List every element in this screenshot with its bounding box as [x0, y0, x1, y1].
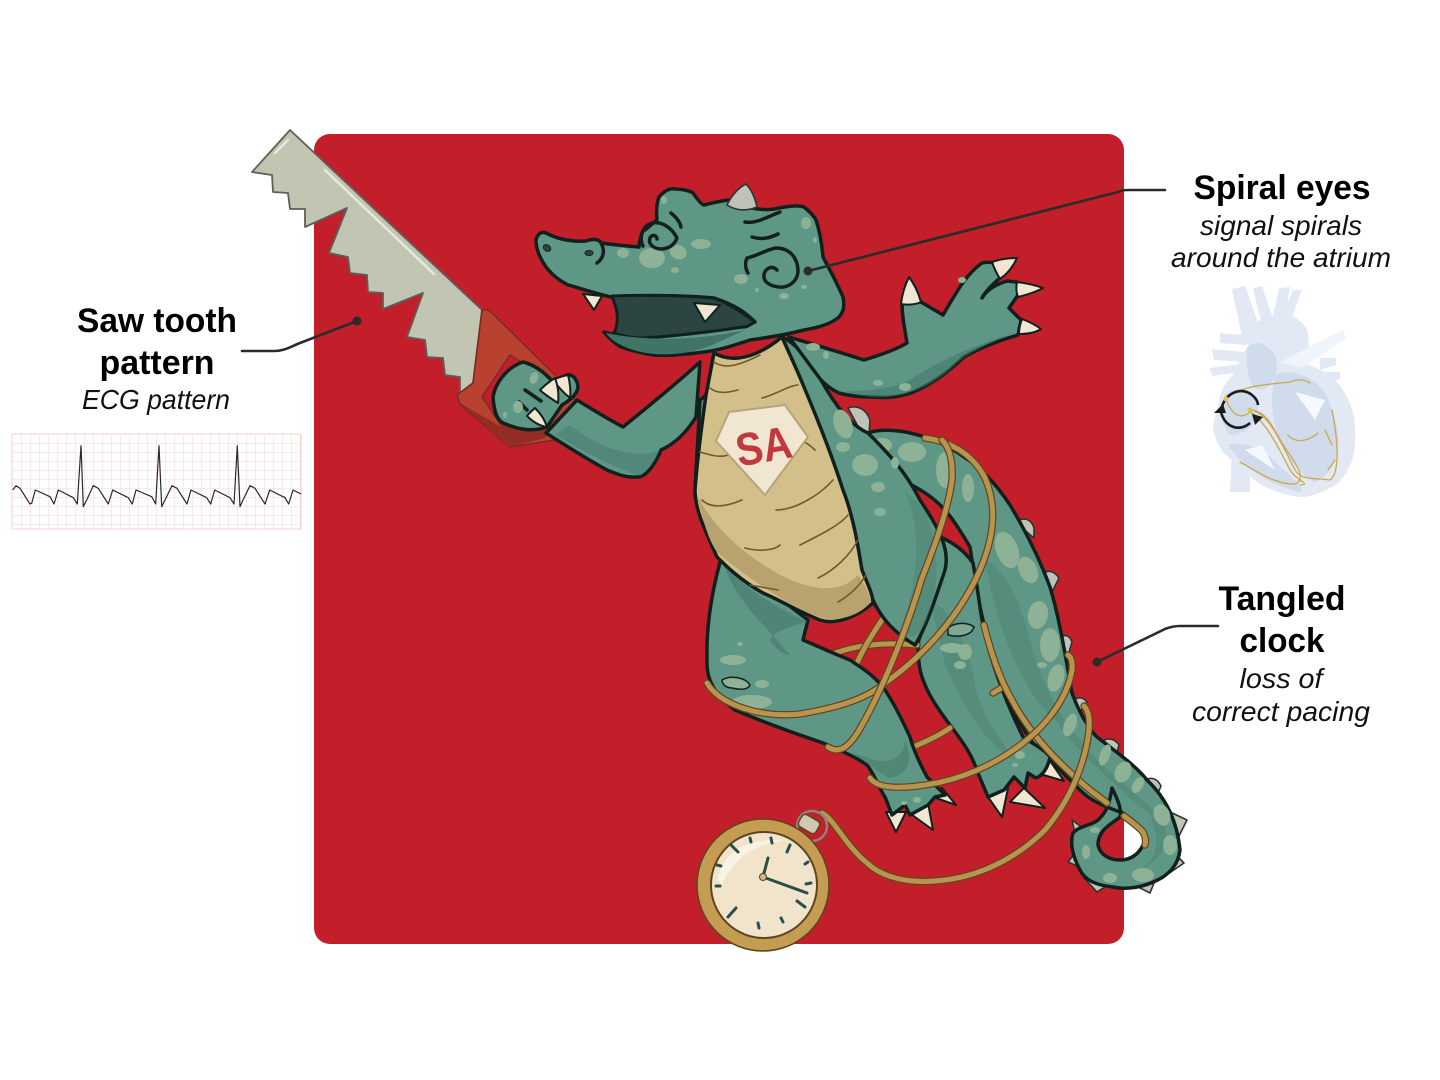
- icon: spiral eye right: [746, 248, 798, 287]
- rear ropes behind body: [830, 617, 1003, 747]
- heading: tangled clock: Tangled: [1218, 580, 1346, 618]
- left arm: [546, 362, 700, 477]
- heading: saw tooth: Saw tooth: [77, 302, 237, 340]
- heading: spiral eyes: around the atrium: [1171, 242, 1391, 273]
- icon: pocket watch: [697, 811, 829, 951]
- icon: SA shield: [716, 405, 808, 495]
- nostrils: [542, 243, 552, 253]
- brows: [671, 212, 780, 238]
- tail spikes: [848, 407, 1187, 893]
- claws: [901, 258, 1043, 334]
- heading: spiral eyes: [1171, 169, 1391, 273]
- mouth: [612, 295, 755, 338]
- right arm: [789, 258, 1043, 398]
- leader: spiral eyes: [804, 190, 1165, 276]
- leader: tangled clock: [1092, 626, 1218, 666]
- chart: ECG strip: [12, 434, 301, 529]
- tail and back: [848, 407, 1187, 893]
- skull and jaw: [536, 189, 844, 355]
- icon: SA shield: SA: [732, 416, 796, 476]
- icon: spiral eye left: [641, 223, 677, 249]
- pocket watch chain: [822, 706, 1089, 881]
- heading: tangled clock: loss of: [1240, 663, 1326, 694]
- heading: spiral eyes: signal spirals: [1200, 210, 1362, 241]
- fist on saw handle: [493, 362, 578, 430]
- head: [536, 184, 844, 355]
- chambers: [1222, 343, 1338, 492]
- heading: saw tooth: ECG pattern: [82, 384, 230, 415]
- circular arrows: [1221, 391, 1258, 428]
- heading: spiral eyes: Spiral eyes: [1194, 169, 1370, 207]
- panel: red background: [314, 134, 1124, 944]
- near hind leg: [707, 555, 1018, 832]
- scale spots: [617, 196, 817, 299]
- icon: saw: [252, 130, 575, 447]
- heading: saw tooth: pattern: [100, 344, 214, 382]
- belly: [695, 337, 873, 622]
- back and tail scale spots: [872, 438, 1177, 883]
- icon: heart conduction diagram: [1210, 286, 1355, 497]
- heart body: [1213, 314, 1355, 497]
- horn: [727, 184, 757, 210]
- heading: tangled clock: correct pacing: [1192, 696, 1370, 727]
- heading: saw tooth: [77, 302, 237, 415]
- far hind leg: [860, 530, 1064, 817]
- teeth: [583, 294, 602, 310]
- conduction paths: [1224, 380, 1337, 485]
- leader: saw tooth: [242, 316, 362, 351]
- rope tangled around body: [707, 438, 1146, 845]
- lower jaw shade: [606, 330, 745, 354]
- heading: tangled clock: clock: [1240, 622, 1325, 660]
- torso: [695, 337, 946, 645]
- heading: tangled clock: [1192, 580, 1370, 727]
- great vessels: [1210, 286, 1340, 492]
